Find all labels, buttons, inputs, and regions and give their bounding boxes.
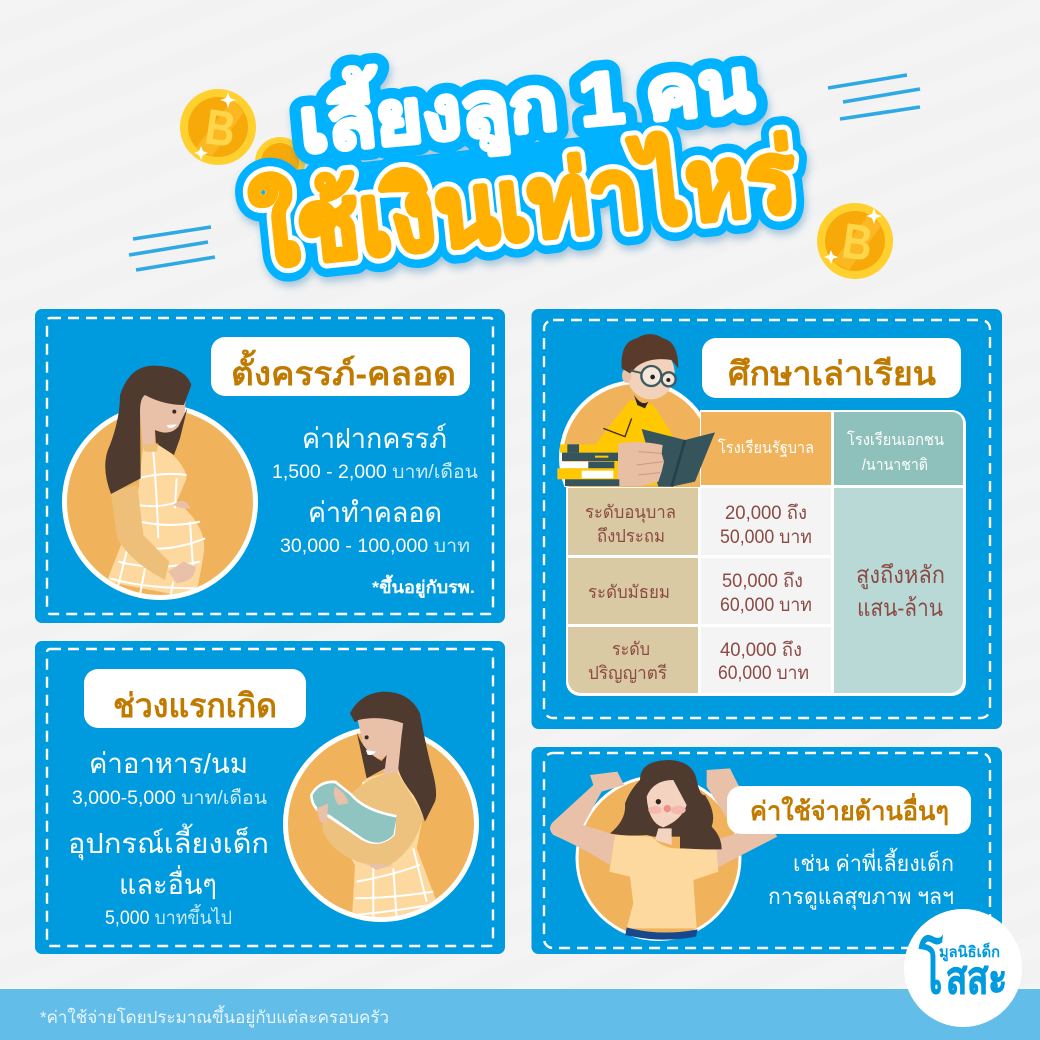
row: bachelor: ระดับ [612, 639, 650, 659]
text: food and milk cost: 3,000-5,000 บาท/เดือน [72, 788, 267, 809]
illustration: mother and baby [283, 692, 479, 925]
panel: other expenses [532, 747, 1002, 954]
cell: private cost [856, 562, 945, 622]
logo: โ [918, 934, 943, 1007]
icon: coin left: B [202, 99, 239, 158]
icon: coin right [817, 203, 893, 279]
column head: private school: /นานาชาติ [862, 457, 928, 474]
panel: education [532, 309, 1002, 729]
row: bachelor: 40,000 ถึง [720, 640, 802, 661]
title: ใช้เงินเท่าไหร่ [246, 118, 801, 289]
text: other examples: เช่น ค่าพี่เลี้ยงเด็ก [793, 848, 954, 876]
text: other examples [768, 848, 954, 910]
text: prenatal cost: 1,500 - 2,000 บาท/เดือน [272, 462, 478, 483]
text: prenatal cost [272, 423, 478, 483]
column head: private school: โรงเรียนเอกชน [847, 430, 944, 449]
text: food and milk cost [72, 748, 267, 809]
illustration backdrop: circle [559, 381, 700, 487]
row: secondary: 50,000 ถึง [722, 571, 803, 592]
text: delivery cost [280, 497, 470, 557]
speed lines left [129, 227, 215, 270]
logo [904, 909, 1022, 1027]
logo: มูลนิธิเด็ก [939, 942, 1000, 962]
speed lines right [828, 75, 920, 119]
panel: pregnancy and birth [35, 309, 505, 623]
panel: newborn [35, 641, 505, 954]
row: secondary [588, 571, 812, 616]
text: baby equipment cost: 5,000 บาทขึ้นไป [105, 904, 232, 929]
title: เลี้ยงลูก 1 คน [295, 30, 757, 173]
row: kindergarten to primary: 50,000 บาท [720, 527, 812, 548]
column head: public school: โรงเรียนรัฐบาล [718, 438, 814, 457]
label: newborn [84, 669, 306, 728]
title [246, 30, 801, 289]
text: food and milk cost: ค่าอาหาร/นม [89, 748, 248, 779]
footer band [0, 989, 1040, 1040]
text: baby equipment cost: อุปกรณ์เลี้ยงเด็ก [68, 823, 269, 861]
text: prenatal cost: ค่าฝากครรภ์ [302, 423, 447, 454]
illustration: pregnant woman [62, 366, 258, 600]
text: other examples: การดูแลสุขภาพ ฯลฯ [768, 884, 954, 910]
row: kindergarten to primary: ระดับอนุบาล [585, 502, 676, 523]
row: kindergarten to primary: ถึงประถม [597, 526, 665, 546]
label: education [702, 338, 961, 398]
footnote: *ค่าใช้จ่ายโดยประมาณขึ้นอยู่กับแต่ละครอบครัว [40, 1005, 389, 1028]
icon: coin right: B [839, 213, 876, 272]
cell: private cost: สูงถึงหลัก [856, 562, 945, 590]
title: ใช้เงินเท่าไหร่ [246, 118, 801, 289]
row: kindergarten to primary [585, 502, 812, 548]
row: bachelor: 60,000 บาท [718, 663, 809, 684]
row: secondary: ระดับมัธยม [588, 582, 670, 602]
icon: coin behind title [255, 137, 305, 187]
logo: สสะ [946, 954, 1007, 1003]
icon: coin left [180, 89, 256, 165]
label: other expenses: ค่าใช้จ่ายด้านอื่นๆ [750, 792, 949, 826]
label: other expenses [727, 786, 971, 834]
row: bachelor: ปริญญาตรี [588, 663, 667, 683]
table: school costs [566, 410, 966, 696]
note: hospital: *ขึ้นอยู่กับรพ. [372, 574, 475, 599]
label: pregnancy [211, 337, 470, 396]
row: secondary: 60,000 บาท [720, 595, 812, 616]
illustration: boy reading [557, 334, 715, 487]
text: baby equipment cost [68, 823, 269, 929]
column head: private school [847, 430, 944, 474]
text: baby equipment cost: และอื่นๆ [119, 865, 217, 900]
title: เลี้ยงลูก 1 คน [295, 30, 757, 173]
label: education: ศึกษาเล่าเรียน [728, 355, 936, 392]
text: delivery cost: 30,000 - 100,000 บาท [280, 536, 470, 557]
row: kindergarten to primary: 20,000 ถึง [725, 503, 807, 524]
title: ใช้เงินเท่าไหร่ [246, 118, 801, 289]
cell: private cost: แสน-ล้าน [857, 595, 943, 622]
label: pregnancy: ตั้งครรภ์-คลอด [231, 349, 456, 392]
row: bachelor [588, 639, 809, 684]
text: delivery cost: ค่าทำคลอด [308, 497, 442, 528]
label: newborn: ช่วงแรกเกิด [113, 687, 277, 724]
illustration: woman flexing [550, 760, 777, 941]
